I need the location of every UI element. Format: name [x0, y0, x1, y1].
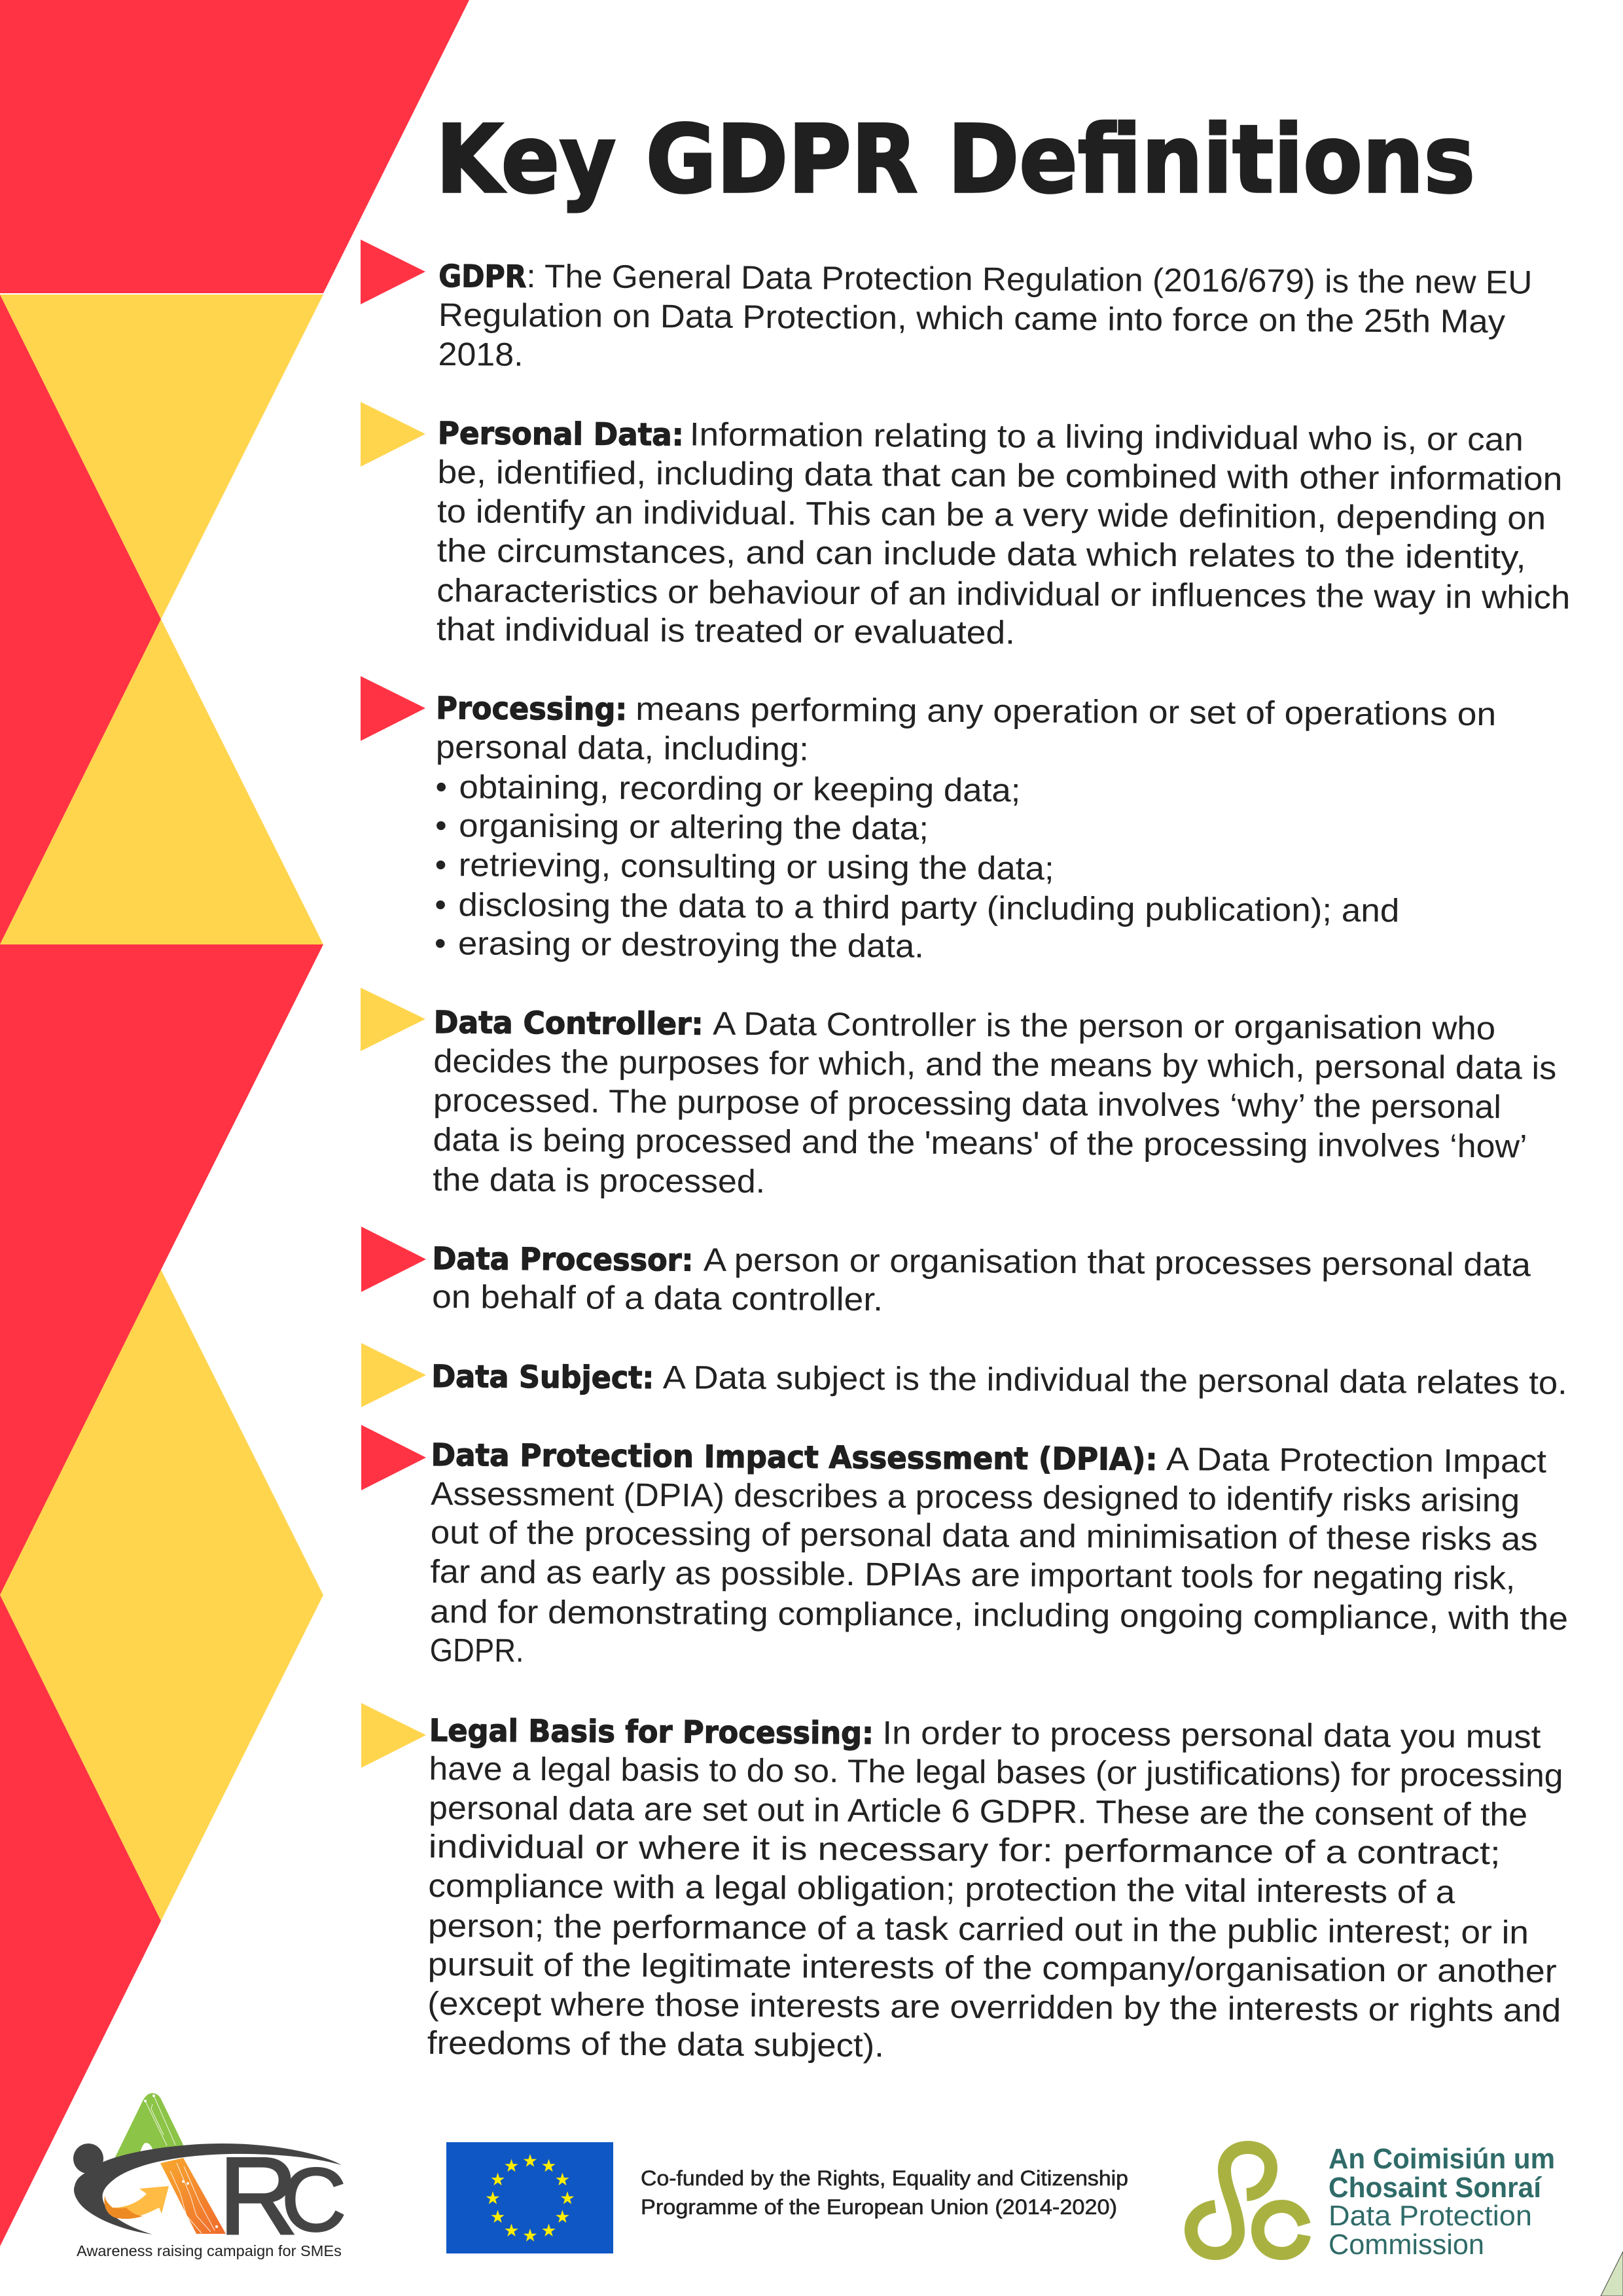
icon: yellow arrow marker: [361, 1343, 426, 1407]
text: Legal Basis definition: (except where those interests are overridden by the interests or rights and: [427, 1985, 1561, 2029]
icon: red arrow marker: [361, 1227, 426, 1292]
text: Data Processor definition: Data Processor:: [432, 1241, 694, 1278]
logo text: RC: R: [219, 2134, 298, 2257]
text: Data Controller definition: Data Controller:: [434, 1005, 704, 1043]
text: Personal Data definition: to identify an individual. This can be a very wide definition, depending on: [437, 493, 1546, 537]
text: Processing definition: •: [435, 846, 446, 883]
text: Data Controller definition: A Data Controller is the person or organisation who: [713, 1005, 1495, 1047]
text: Processing definition: disclosing the data to a third party (including publication); and: [458, 886, 1399, 929]
text: Personal Data definition: be, identified, including data that can be combined with other information: [437, 454, 1563, 497]
definition: Personal Data: [361, 402, 1571, 655]
text: Data Subject definition: Data Subject:: [431, 1359, 654, 1396]
text: Legal Basis definition: [427, 1712, 1563, 2068]
logo: Data Protection Commission: [1191, 2143, 1555, 2261]
logo tagline: Awareness raising campaign for SMEs: [77, 2242, 342, 2259]
text: Personal Data definition: that individual is treated or evaluated.: [437, 611, 1015, 651]
text: Legal Basis definition: pursuit of the legitimate interests of the company/organisation or another: [427, 1946, 1557, 1990]
text: Legal Basis definition: personal data are set out in Article 6 GDPR. These are the consent of the: [429, 1789, 1527, 1833]
text: Legal Basis definition: individual or where it is necessary for: performance of a contract;: [429, 1828, 1501, 1871]
logo text: commission name: Data Protection: [1329, 2200, 1532, 2232]
logo text: commission name: An Coimisiún um: [1329, 2143, 1555, 2175]
definition: Legal Basis for Processing: [361, 1703, 1563, 2068]
icon: red arrow marker: [361, 240, 425, 304]
text: Data Subject definition: A Data subject is the individual the personal data relates to.: [663, 1359, 1567, 1401]
text: DPIA definition: Data Protection Impact Assessment (DPIA):: [431, 1437, 1158, 1478]
icon: yellow arrow marker: [361, 1703, 426, 1768]
text: Processing definition: •: [435, 807, 447, 844]
text: Legal Basis definition: have a legal basis to do so. The legal bases (or justifications) for processing: [429, 1750, 1563, 1794]
text: Processing definition: means performing any operation or set of operations on: [635, 691, 1496, 732]
text: Legal Basis definition: In order to process personal data you must: [882, 1714, 1541, 1755]
logo text: RC: C: [281, 2150, 346, 2250]
logo text: commission name: [1329, 2143, 1555, 2261]
text: DPIA definition: far and as early as possible. DPIAs are important tools for negating risk,: [430, 1553, 1516, 1596]
text: Personal Data definition: characteristics or behaviour of an individual or influences the way in which: [437, 572, 1570, 616]
icon: yellow arrow marker: [361, 402, 425, 467]
text: EU co-funding statement: Programme of the European Union (2014-2020): [641, 2195, 1117, 2219]
text: Data Controller definition: decides the purposes for which, and the means by which, personal data is: [433, 1043, 1556, 1086]
text: GDPR definition: : The General Data Protection Regulation (2016/679) is the new EU: [526, 258, 1533, 301]
text: Data Processor definition: A person or organisation that processes personal data: [704, 1242, 1531, 1283]
icon: red arrow marker: [361, 676, 425, 741]
text: Processing definition: personal data, including:: [436, 728, 809, 768]
definition: Data Subject: [361, 1343, 1567, 1407]
text: Personal Data definition: the circumstances, and can include data which relates to the identity,: [437, 532, 1526, 575]
text: Processing definition: erasing or destroying the data.: [458, 925, 924, 965]
text: Personal Data definition: Information relating to a living individual who is, or can: [690, 416, 1524, 457]
text: DPIA definition: and for demonstrating compliance, including ongoing compliance, with the: [430, 1593, 1568, 1637]
text: Processing definition: •: [435, 886, 446, 923]
text: Data Processor definition: [432, 1240, 1531, 1322]
definition: GDPR: [361, 240, 1533, 380]
text: EU co-funding statement: Co-funded by the Rights, Equality and Citizenship: [641, 2166, 1128, 2190]
logo: ARC campaign: [73, 2093, 346, 2259]
text: Personal Data definition: [437, 414, 1571, 655]
text: Processing definition: •: [435, 768, 447, 805]
background: red and yellow geometric column: [0, 0, 469, 2246]
text: DPIA definition: Assessment (DPIA) describes a process designed to identify risks arising: [431, 1475, 1520, 1518]
definition: Data Protection Impact Assessment: [361, 1425, 1569, 1676]
text: Data Controller definition: [433, 1003, 1557, 1205]
corner: pale green triangle: [1601, 2251, 1623, 2296]
logo text: commission name: Commission: [1329, 2229, 1484, 2261]
text: Data Controller definition: processed. The purpose of processing data involves ‘why’ the personal: [433, 1082, 1501, 1125]
text: Processing definition: [435, 689, 1496, 968]
text: GDPR definition: [438, 257, 1533, 380]
text: Legal Basis definition: person; the performance of a task carried out in the public interest; or in: [428, 1907, 1529, 1951]
text: GDPR definition: 2018.: [438, 336, 524, 373]
text: Legal Basis definition: compliance with a legal obligation; protection the vital interests of a: [428, 1867, 1455, 1910]
text: Data Controller definition: the data is processed.: [433, 1161, 765, 1200]
text: DPIA definition: GDPR.: [429, 1632, 524, 1669]
text: DPIA definition: [429, 1436, 1569, 1676]
text: GDPR definition: Regulation on Data Protection, which came into force on the 25th May: [438, 296, 1505, 340]
text: Processing definition: obtaining, recording or keeping data;: [459, 768, 1021, 809]
text: Data Controller definition: data is being processed and the 'means' of the processing involves ‘how’: [433, 1121, 1527, 1164]
text: Data Processor definition: on behalf of a data controller.: [432, 1278, 883, 1318]
logo text: commission name: Chosaint Sonraí: [1329, 2172, 1543, 2204]
text: Personal Data definition: Personal Data:: [438, 416, 684, 453]
text: Legal Basis definition: freedoms of the data subject).: [427, 2024, 884, 2064]
icon: yellow arrow marker: [361, 988, 425, 1051]
logo: EU flag: [446, 2142, 613, 2253]
text: Legal Basis definition: Legal Basis for Processing:: [429, 1713, 874, 1751]
definition: Data Processor: [361, 1227, 1531, 1322]
text: Processing definition: retrieving, consulting or using the data;: [459, 846, 1054, 887]
text: DPIA definition: out of the processing of personal data and minimisation of these risks as: [431, 1514, 1538, 1558]
text: Processing definition: organising or altering the data;: [459, 807, 929, 847]
definition: Data Controller: [361, 988, 1557, 1205]
text: EU co-funding statement: [641, 2166, 1128, 2219]
text: Processing definition: Processing:: [436, 691, 627, 728]
text: Processing definition: •: [435, 925, 446, 961]
text: GDPR definition: GDPR: [438, 259, 527, 295]
icon: red arrow marker: [361, 1425, 426, 1490]
definition: Processing: [361, 676, 1496, 968]
text: DPIA definition: A Data Protection Impact: [1166, 1441, 1546, 1480]
title: Key GDPR Definitions: [436, 105, 1475, 214]
